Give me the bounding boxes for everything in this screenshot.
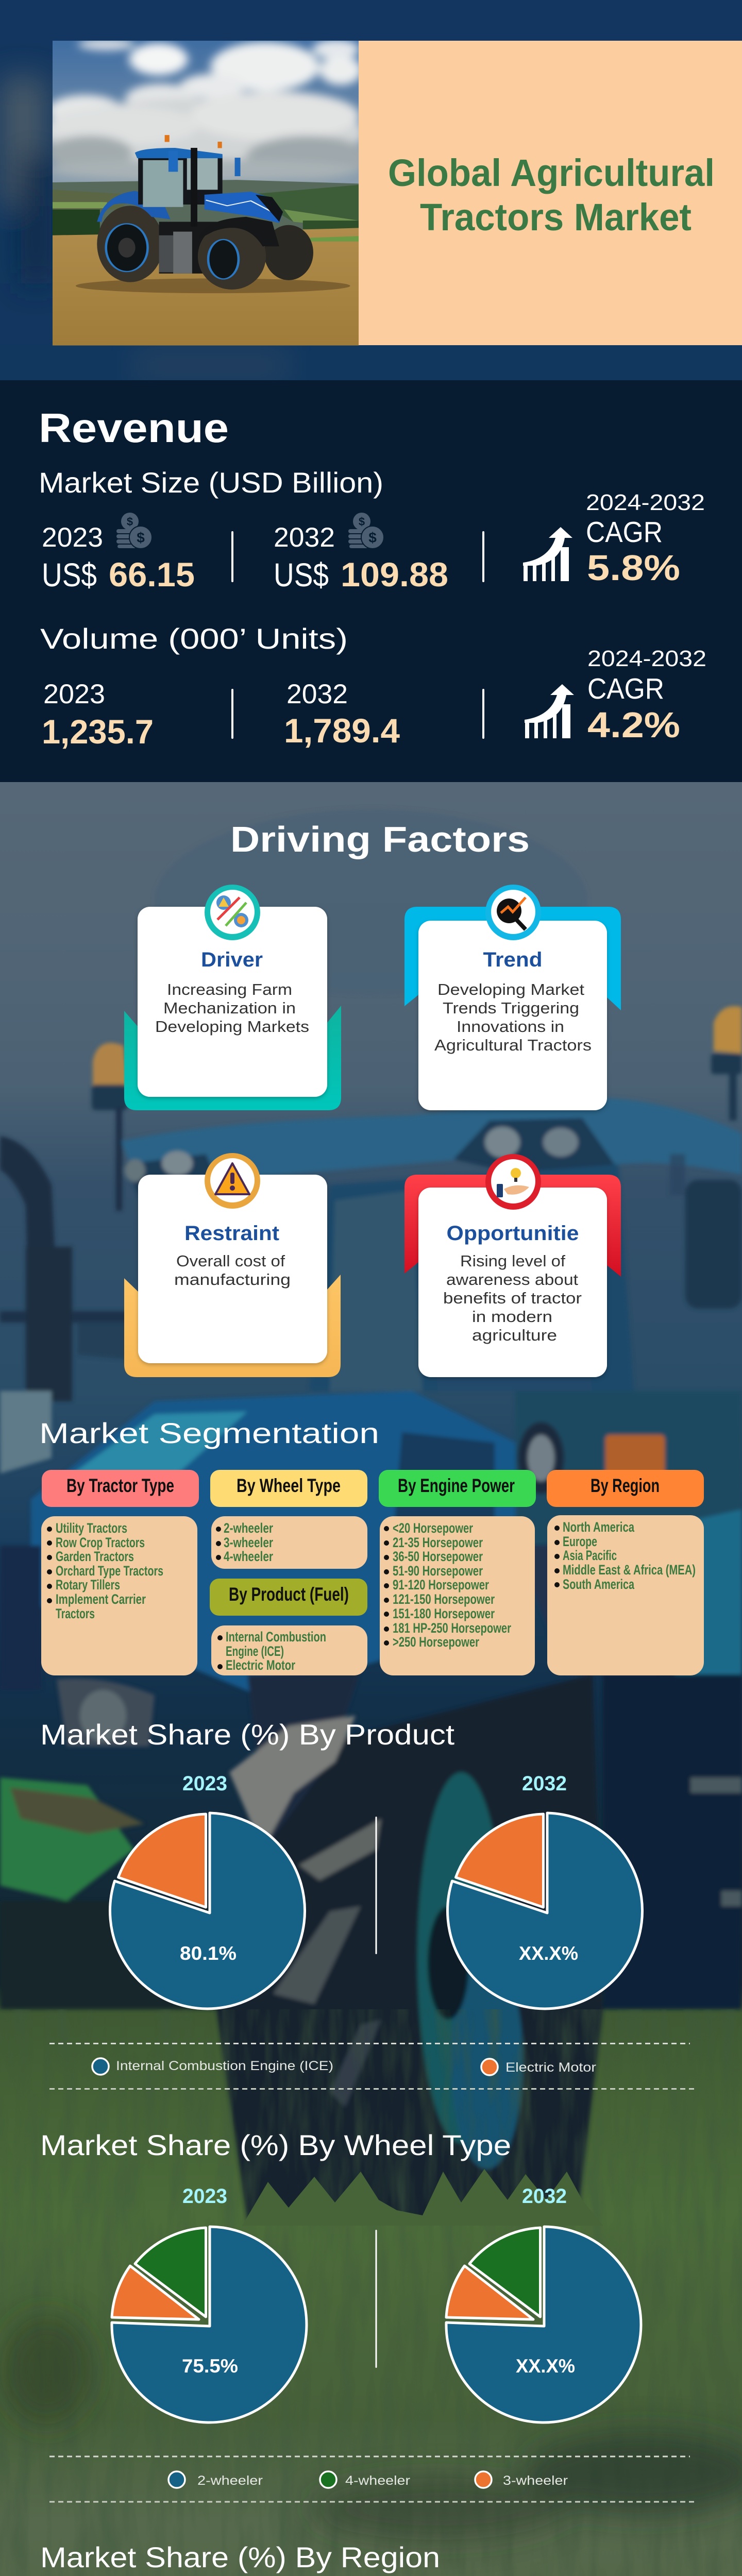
segment: by engine power: <20 Horsepower [393, 1520, 473, 1536]
restraint text: Overall cost of [176, 1252, 285, 1270]
heading: driving factors: Driving Factors [230, 819, 530, 859]
legend: wheel type [49, 2456, 695, 2502]
segment: by product fuel [210, 1579, 367, 1675]
market size 2023 [42, 522, 195, 594]
segment: by engine power: 36-50 Horsepower [393, 1549, 483, 1564]
background photograph: tractor in grass [0, 782, 742, 2576]
segment: by tractor type: Rotary Tillers [56, 1577, 120, 1592]
icon: driver [205, 885, 260, 940]
title panel [359, 41, 742, 345]
opportunitie text: awareness about [446, 1270, 578, 1289]
divider [375, 2230, 377, 2368]
revenue heading: Revenue [39, 405, 229, 451]
segment: by engine power: By Engine Power [398, 1475, 515, 1496]
segment: by region [547, 1470, 704, 1675]
card: opportunitie: Opportunitie [446, 1222, 579, 1245]
trend text: Trends Triggering [443, 999, 579, 1017]
heading: market segmentation: Market Segmentation [39, 1417, 379, 1449]
pie chart: wheel type 2032 [446, 2185, 641, 2422]
segment: by region: Europe [563, 1534, 597, 1549]
divider [231, 531, 233, 582]
roof [121, 1097, 742, 1206]
wheel rim [417, 1772, 505, 2143]
divider [231, 689, 233, 739]
icon: coins 2023 [116, 513, 152, 549]
segment: by engine power: 91-120 Horsepower [393, 1577, 489, 1592]
opportunitie text: agriculture [472, 1326, 557, 1344]
cagr 5.8%: 5.8% [587, 548, 680, 588]
segment: by region: South America [563, 1577, 635, 1592]
segment: by wheel type: 2-wheeler [224, 1520, 273, 1536]
lamp [57, 1679, 155, 1747]
volume 2032 [284, 679, 400, 750]
segment: by tractor type: Implement Carrier [56, 1591, 146, 1607]
segment: by wheel type [210, 1470, 367, 1569]
icon: restraint [205, 1153, 260, 1209]
divider [482, 689, 484, 739]
segment: by engine power: 21-35 Horsepower [393, 1535, 483, 1550]
segment: by product fuel: Engine (ICE) [226, 1643, 284, 1659]
segment: by engine power: 121-150 Horsepower [393, 1591, 495, 1607]
heading: market share by region: Market Share (%) By Region [40, 2541, 440, 2573]
tractor photograph [43, 38, 369, 346]
hills [53, 180, 359, 234]
title: Tractors Market [420, 196, 692, 239]
revenue panel [0, 380, 742, 782]
market size 2032: US$ [274, 556, 329, 594]
heading: market share by wheel type: Market Share (%) By Wheel Type [40, 2129, 511, 2161]
segment: by product fuel: Electric Motor [226, 1657, 295, 1673]
title [388, 151, 715, 239]
restraint text: manufacturing [174, 1270, 291, 1289]
grass spikes over tire [242, 2169, 603, 2226]
driver text [155, 980, 309, 1036]
cagr 4.2%: CAGR [587, 672, 664, 705]
segment: by wheel type: 4-wheeler [224, 1549, 273, 1564]
icon: coins 2023: $ [127, 515, 133, 528]
market size 2032: 2032 [274, 522, 335, 553]
segment: by engine power: 51-90 Horsepower [393, 1563, 483, 1579]
market size heading: Market Size (USD Billion) [39, 466, 383, 499]
pie chart: product 2032: XX.X% [519, 1943, 578, 1964]
legend: product: Internal Combustion Engine (ICE) [116, 2059, 333, 2073]
segment: by engine power: 181 HP-250 Horsepower [393, 1620, 511, 1636]
right dark [603, 1674, 742, 2009]
cagr 5.8%: 2024-2032 [586, 490, 705, 515]
opportunitie text [443, 1252, 582, 1344]
card: trend [404, 885, 621, 1110]
market size 2023: US$ [42, 556, 97, 594]
tire [216, 1674, 603, 2221]
opportunitie text: Rising level of [460, 1252, 565, 1270]
segment: by engine power: 151-180 Horsepower [393, 1606, 495, 1621]
pie chart: product 2023: 80.1% [180, 1943, 237, 1964]
legend: wheel type: 4-wheeler [345, 2473, 410, 2488]
icon: growth chart [525, 684, 574, 738]
legend: product: Electric Motor [505, 2060, 596, 2075]
market size 2032 [274, 522, 448, 594]
header background [0, 0, 742, 381]
icon: growth chart [523, 527, 572, 581]
card: driver: Driver [201, 948, 263, 971]
driver text: Increasing Farm [167, 980, 292, 998]
pie chart: wheel type 2032: 2032 [522, 2185, 567, 2208]
title: Global Agricultural [388, 151, 715, 194]
segment: by wheel type: 3-wheeler [224, 1535, 273, 1550]
card: opportunitie [404, 1154, 621, 1377]
lights [93, 1043, 129, 1092]
volume 2032: 1,789.4 [284, 711, 400, 750]
pie chart: wheel type 2023: 2023 [182, 2185, 227, 2208]
icon: coins 2032: $ [359, 515, 365, 528]
cagr 5.8% [586, 490, 705, 588]
segment: by region: North America [563, 1519, 635, 1535]
segment: by tractor type [41, 1470, 199, 1675]
icon: opportunitie [485, 1154, 541, 1210]
volume 2023 [42, 679, 154, 751]
card: restraint [124, 1153, 341, 1377]
segment: by region: Asia Pacific [563, 1548, 617, 1563]
pie chart: product 2023 [110, 1772, 305, 2009]
clouds [43, 38, 369, 181]
segment: by tractor type: Row Crop Tractors [56, 1535, 145, 1550]
cagr 4.2% [587, 646, 706, 745]
segment: by engine power: >250 Horsepower [393, 1634, 479, 1650]
haze of upper sky [155, 809, 587, 994]
trend text: Developing Market [437, 980, 584, 998]
cagr 5.8%: CAGR [586, 516, 663, 549]
trend text [434, 980, 592, 1054]
cagr 4.2%: 2024-2032 [587, 646, 706, 671]
segment: by tractor type: Tractors [56, 1606, 95, 1621]
card: driver [124, 885, 341, 1110]
segment: by wheel type: By Wheel Type [237, 1475, 341, 1496]
hood [0, 1391, 52, 1473]
segment: by region: Middle East & Africa (MEA) [563, 1562, 696, 1578]
segment: by tractor type: Orchard Type Tractors [56, 1563, 163, 1579]
cab [138, 155, 223, 205]
legend: wheel type: 3-wheeler [503, 2473, 568, 2488]
pie chart: wheel type 2023 [112, 2185, 307, 2422]
segment: by engine power [379, 1470, 536, 1675]
segment: by tractor type: Utility Tractors [56, 1520, 127, 1536]
segment: by product fuel: Internal Combustion [226, 1629, 326, 1645]
icon: coins 2023: $ [137, 530, 145, 546]
divider [482, 531, 484, 582]
pie chart: product 2023: 2023 [182, 1772, 227, 1795]
icon: coins 2032 [348, 513, 384, 549]
divider [375, 1817, 377, 1954]
segment: by product fuel: By Product (Fuel) [229, 1584, 349, 1605]
heading: market share by product: Market Share (%) By Product [40, 1718, 454, 1751]
legend: wheel type: 2-wheeler [197, 2473, 263, 2488]
card: restraint: Restraint [184, 1222, 279, 1245]
field [53, 228, 359, 346]
volume 2023: 1,235.7 [42, 713, 154, 751]
cab [309, 1164, 634, 1391]
segment: by tractor type: By Tractor Type [66, 1475, 174, 1496]
pie chart: product 2032: 2032 [522, 1772, 567, 1795]
cagr 4.2%: 4.2% [587, 705, 680, 745]
segment: by tractor type: Garden Tractors [56, 1549, 134, 1564]
opportunitie text: benefits of tractor [443, 1289, 582, 1307]
trend text: Innovations in [457, 1018, 564, 1036]
market size 2023: 2023 [42, 522, 103, 553]
volume 2032: 2032 [286, 679, 348, 709]
pie chart: product 2032 [447, 1772, 642, 2009]
pie chart: wheel type 2023: 75.5% [182, 2355, 238, 2377]
driver text: Developing Markets [155, 1018, 309, 1036]
restraint text [174, 1252, 291, 1289]
card: trend: Trend [483, 948, 542, 971]
pie chart: wheel type 2032: XX.X% [516, 2355, 575, 2377]
volume heading: Volume (000’ Units) [40, 622, 348, 655]
icon: coins 2032: $ [368, 530, 377, 546]
opportunitie text: in modern [472, 1308, 552, 1326]
wheels and body [264, 225, 313, 280]
driver text: Mechanization in [163, 999, 296, 1017]
market size 2023: 66.15 [109, 555, 195, 594]
hood [205, 192, 283, 223]
trend text: Agricultural Tractors [434, 1036, 592, 1054]
green implement [0, 1777, 134, 1901]
icon: trend [485, 885, 541, 940]
segment: by region: By Region [591, 1475, 660, 1496]
market size 2032: 109.88 [341, 555, 448, 594]
legend: product [49, 2043, 695, 2089]
grass texture [0, 2009, 742, 2576]
volume 2023: 2023 [43, 679, 105, 709]
